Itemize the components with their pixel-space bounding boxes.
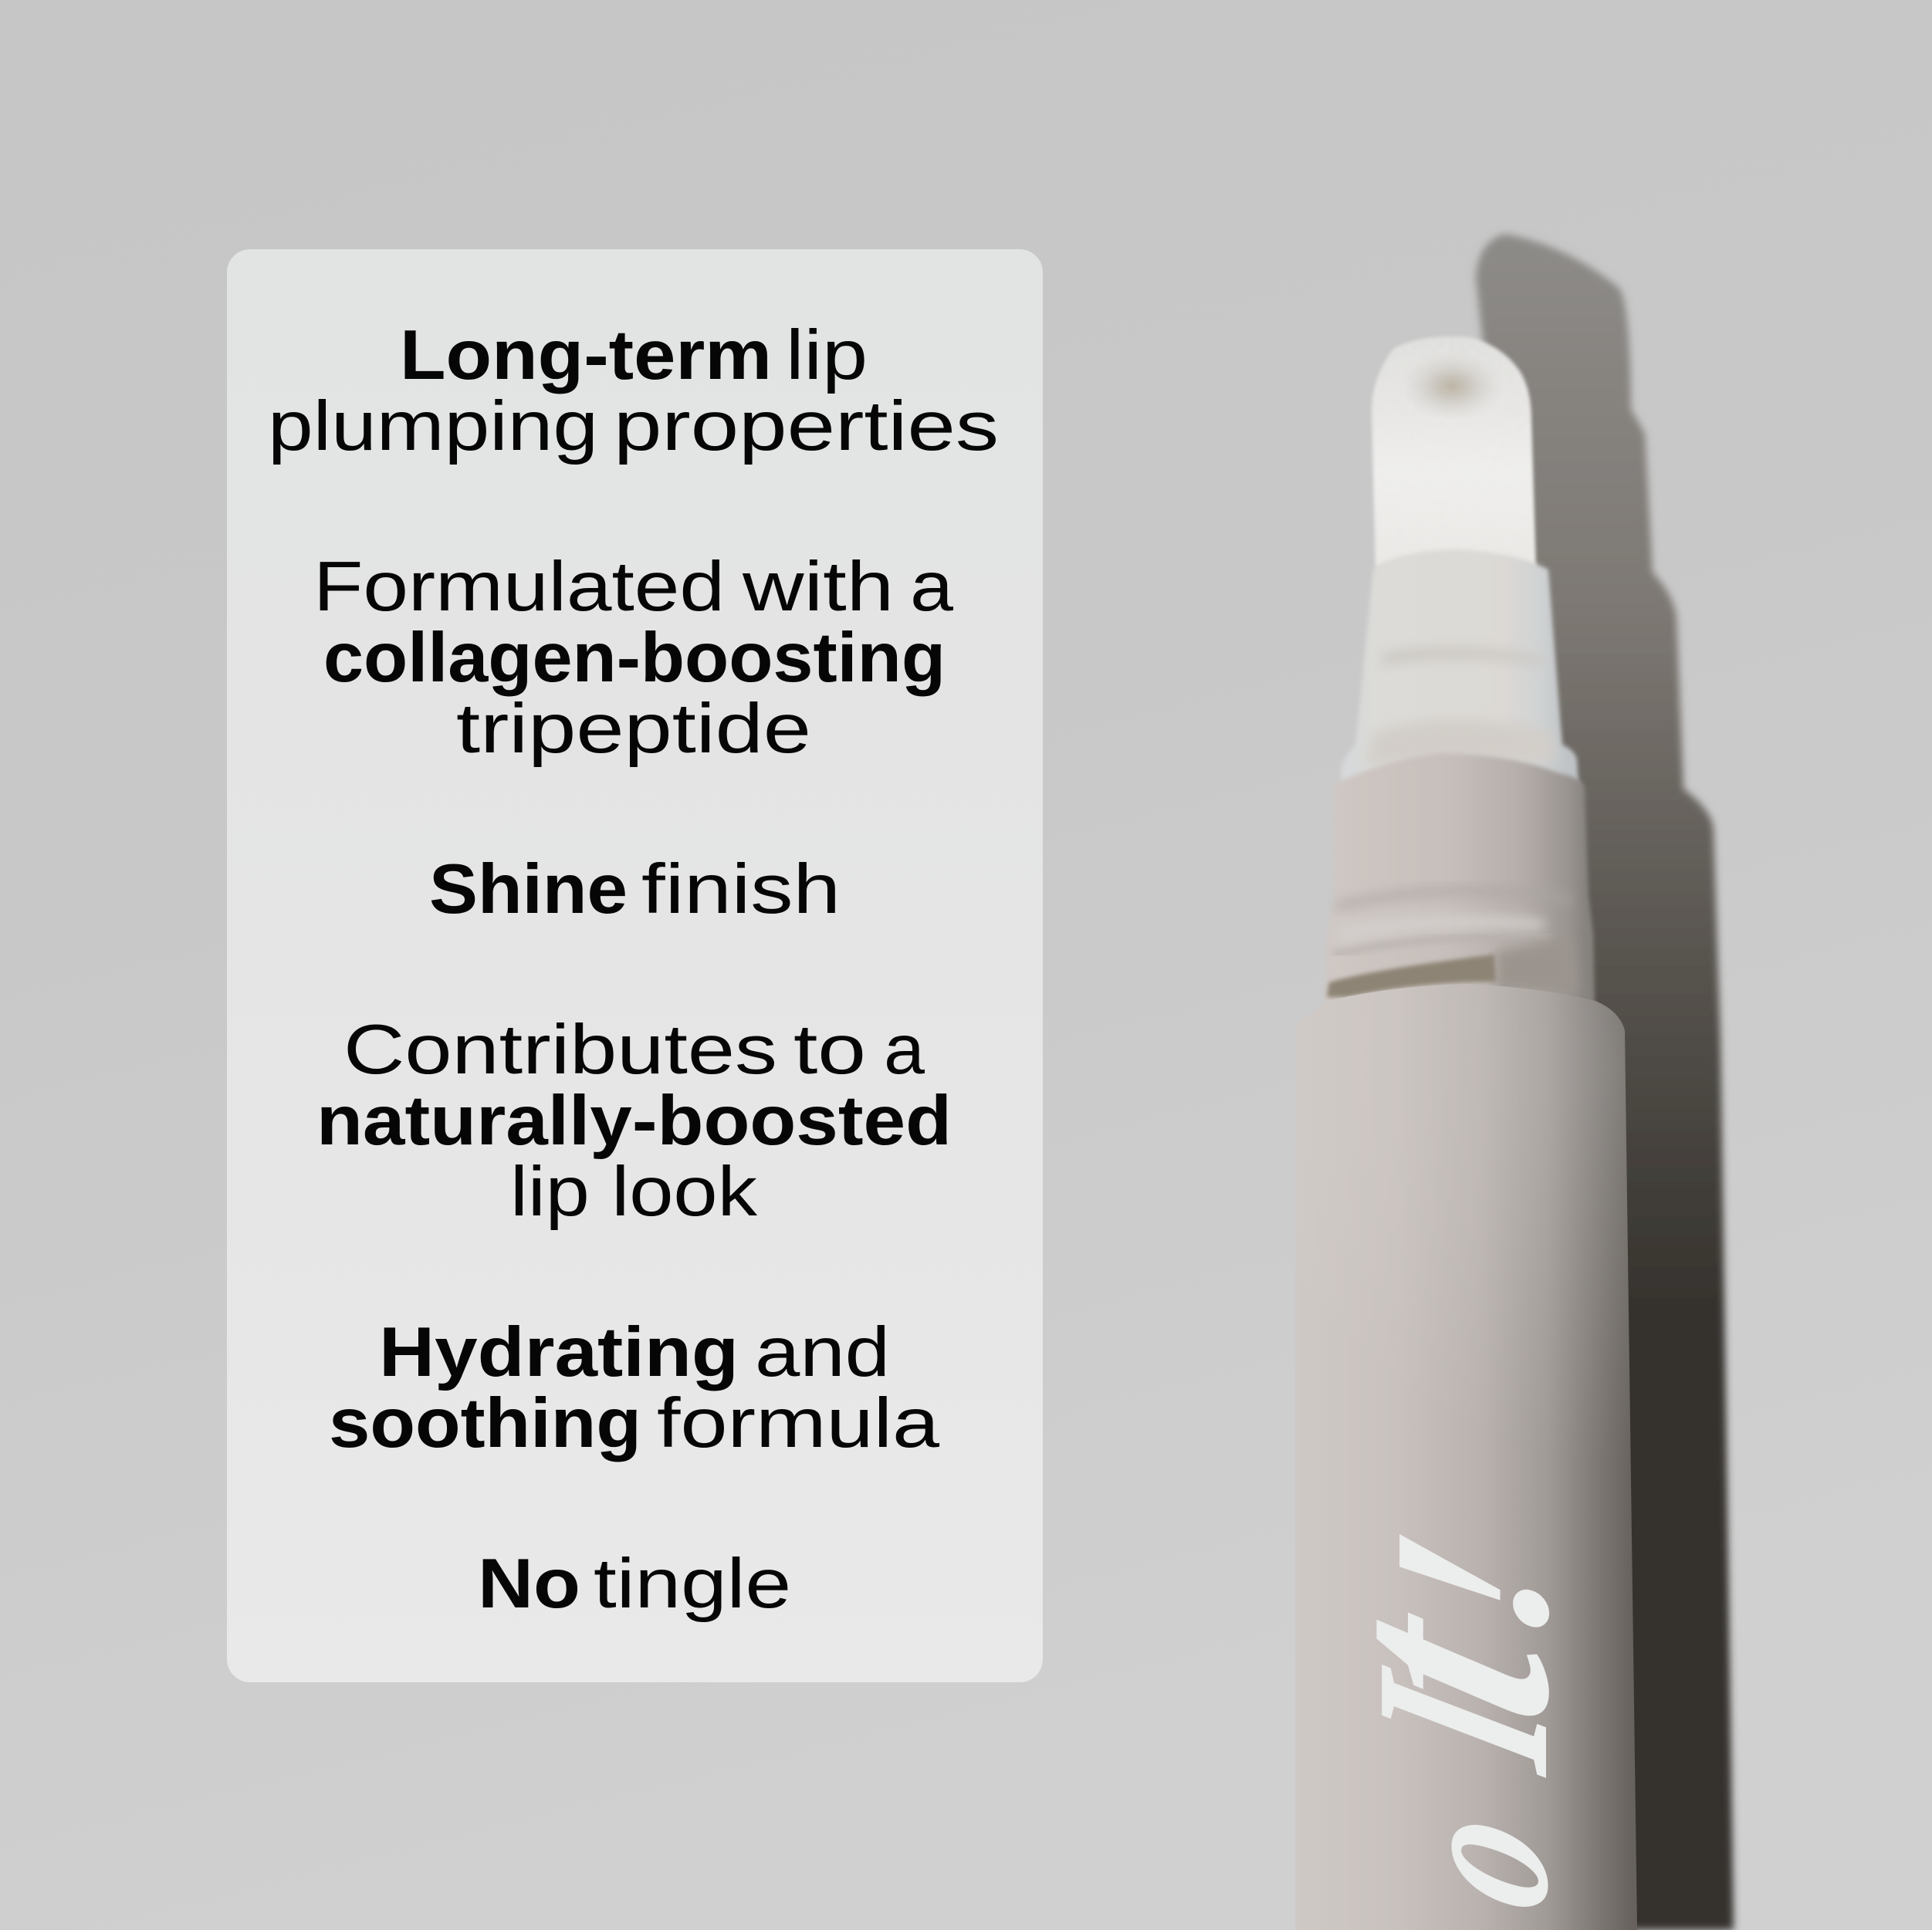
text block: hydrating and soothing formula: and	[755, 1313, 890, 1391]
text block: hydrating and soothing formula: formula	[657, 1384, 939, 1462]
applicator tube	[1277, 336, 1637, 1930]
text block: naturally-boosted lip look: to	[793, 1011, 866, 1089]
text block: shine finish	[429, 850, 841, 928]
sponge tip dimple	[1399, 350, 1504, 421]
brand lettering on tube: !	[1347, 1507, 1595, 1661]
text block: shine finish: finish	[641, 850, 841, 928]
brand lettering on tube: t	[1277, 1575, 1611, 1748]
text block: long-term lip plumping: Long-term	[400, 316, 772, 394]
brand lettering on tube: I	[1322, 1648, 1601, 1793]
tube body	[1295, 984, 1637, 1930]
text block: naturally-boosted lip look: a	[884, 1011, 925, 1089]
panel background card	[227, 249, 1043, 1682]
text block: naturally-boosted lip look: lip look	[510, 1153, 758, 1231]
text block: long-term lip plumping	[268, 316, 999, 465]
text block: collagen-boosting tripeptide: a	[910, 548, 953, 626]
text block: no tingle: No	[478, 1545, 580, 1623]
text block: naturally-boosted lip look	[316, 1011, 952, 1231]
brand lettering on tube	[1277, 1507, 1611, 1928]
text block: long-term lip plumping: plumping	[268, 387, 598, 465]
collar and threaded neck	[1325, 753, 1595, 1003]
text block: collagen-boosting tripeptide: with	[742, 548, 894, 626]
text block: collagen-boosting tripeptide: Formulated	[313, 548, 725, 626]
brand lettering on tube: o	[1368, 1789, 1590, 1928]
text block: long-term lip plumping: properties	[614, 387, 999, 465]
sponge tip	[1372, 336, 1536, 567]
text block: hydrating and soothing formula: Hydrating	[379, 1313, 739, 1391]
text block: hydrating and soothing formula: soothing	[329, 1384, 641, 1462]
panel: benefits list	[227, 249, 1043, 1682]
text block: collagen-boosting tripeptide: tripeptide	[456, 690, 811, 768]
text block: collagen-boosting tripeptide	[313, 548, 953, 768]
text block: long-term lip plumping: lip	[786, 316, 868, 394]
text block: no tingle	[478, 1545, 791, 1623]
text block: shine finish: Shine	[429, 850, 628, 928]
text block: naturally-boosted lip look: naturally-boosted	[316, 1082, 952, 1160]
text block: naturally-boosted lip look: Contributes	[343, 1011, 777, 1089]
text block: hydrating and soothing formula	[329, 1313, 939, 1462]
clear cap collar	[1340, 549, 1579, 795]
text block: collagen-boosting tripeptide: collagen-boosting	[323, 619, 946, 697]
cast shadow of applicator	[1476, 234, 1734, 1930]
text block: no tingle: tingle	[594, 1545, 791, 1623]
